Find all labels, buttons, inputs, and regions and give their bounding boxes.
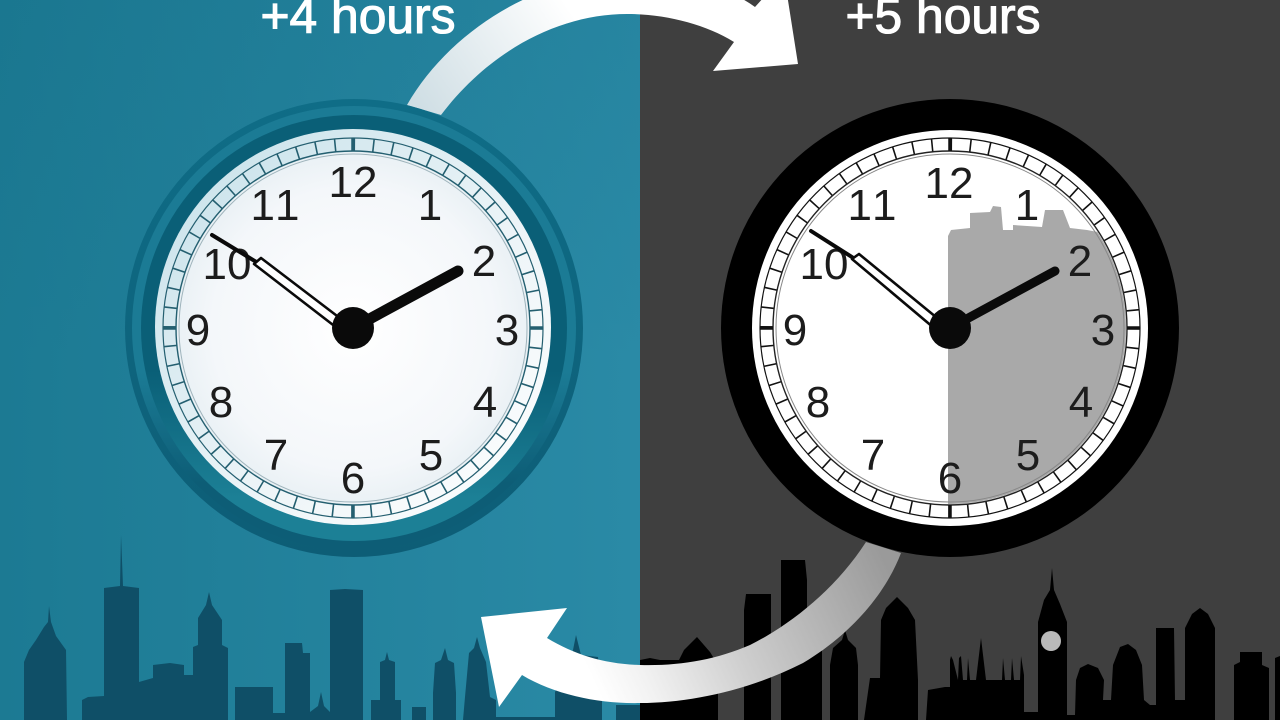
clock numerals: 2: [1068, 237, 1092, 286]
clock numerals: 12: [925, 159, 973, 208]
clock numerals: 2: [472, 237, 496, 286]
hour hand: [353, 271, 458, 328]
clock bezel: [125, 99, 583, 557]
clock bezel: [721, 99, 1179, 557]
clock numerals: 10: [800, 240, 848, 289]
clock dial centre: [177, 152, 529, 504]
clock numerals: [186, 158, 519, 503]
left clock: [125, 99, 583, 557]
clock numerals: 1: [418, 181, 442, 230]
clock numerals: 9: [783, 306, 807, 355]
panel: left teal background: [0, 0, 640, 720]
clock numerals: 6: [938, 454, 962, 503]
clock numerals: 3: [495, 306, 519, 355]
clock numerals: 11: [848, 181, 896, 230]
clock numerals: 3: [1091, 306, 1115, 355]
clock numerals: [783, 159, 1115, 503]
center hub: [332, 307, 374, 349]
panel: right dark background: [640, 0, 1280, 720]
clock face: [752, 130, 1148, 526]
minute hand: [212, 235, 345, 328]
arrow: top curved arrow from left clock to right side: [407, 0, 798, 115]
clock numerals: 5: [419, 431, 443, 480]
right clock: [721, 99, 1179, 557]
clock numerals: 4: [473, 378, 497, 427]
skyline: right city: [640, 560, 1280, 720]
clock numerals: 8: [209, 378, 233, 427]
arrow: bottom curved arrow from right clock to left side: [481, 542, 901, 707]
clock numerals: 7: [861, 431, 885, 480]
skyline shadow on face: [948, 206, 1126, 504]
clock numerals: 4: [1069, 378, 1093, 427]
clock numerals: 9: [186, 306, 210, 355]
clock numerals: 8: [806, 378, 830, 427]
hour hand: [950, 271, 1055, 328]
clock numerals: 12: [329, 158, 377, 207]
clock face: [155, 129, 551, 525]
clock numerals: 10: [203, 240, 251, 289]
clock numerals: 6: [341, 454, 365, 503]
skyline: left city: [24, 535, 640, 720]
icon: tower clock face: [1041, 631, 1061, 651]
clock numerals: 11: [251, 181, 299, 230]
clock numerals: 7: [264, 431, 288, 480]
center hub: [929, 307, 971, 349]
clock numerals: 5: [1016, 431, 1040, 480]
clock numerals: 1: [1015, 181, 1039, 230]
minute tick ring: [760, 138, 1140, 518]
minute tick ring: [163, 138, 543, 518]
minute hand: [811, 231, 942, 328]
